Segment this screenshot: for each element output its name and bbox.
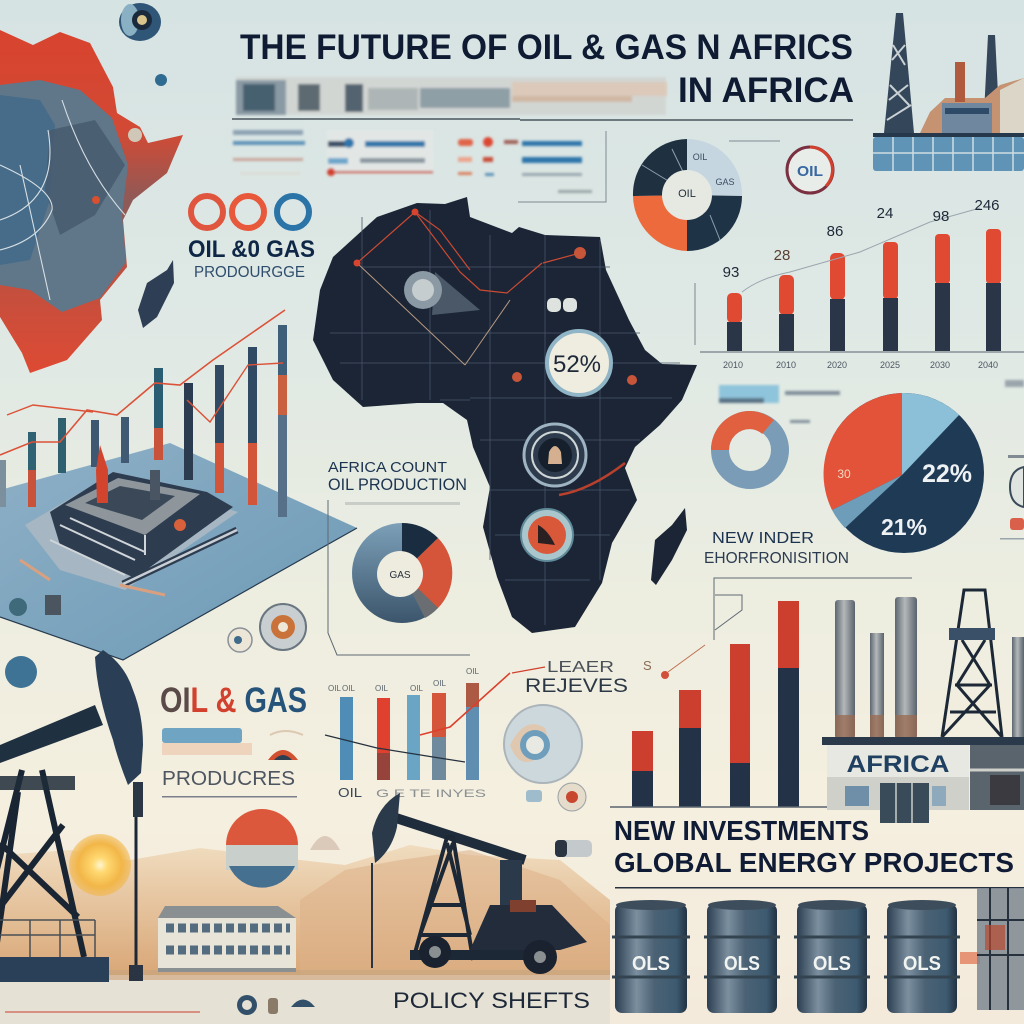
- bars: [0, 325, 287, 517]
- bar chart: top right: 2020: [827, 360, 847, 370]
- icon: left pumpjack and derrick: [0, 650, 143, 982]
- bar chart: top right: 24: [877, 205, 893, 222]
- barrel 1: [612, 900, 690, 1013]
- chart: top donut: GAS: [715, 177, 735, 187]
- panel: central Africa map: [313, 197, 697, 633]
- chart: large pie: 30: [837, 467, 851, 481]
- panel: building: [158, 906, 296, 972]
- label: leader reserves: S: [643, 658, 652, 673]
- bar chart: top right: 2010: [776, 360, 796, 370]
- chart: large pie: [824, 393, 984, 553]
- barrel 3: [794, 900, 870, 1013]
- title: IN AFRICA: [678, 71, 854, 110]
- bar chart: top right: 86: [827, 223, 843, 240]
- panel: Africa refinery: AFRICA: [846, 751, 950, 778]
- chart: right small donut: [720, 420, 780, 480]
- label: policy shifts: POLICY SHEFTS: [393, 988, 590, 1013]
- panel: Oil and gas producers: OIL & GAS: [160, 681, 307, 720]
- bar chart: top right: 2030: [930, 360, 950, 370]
- callout: 52 percent: [547, 331, 611, 395]
- heading: new investments: NEW INVESTMENTS: [614, 815, 869, 846]
- panel: oil and gas production rings: [188, 196, 315, 281]
- panel: offshore rig top right: [873, 13, 1024, 171]
- panel: left chart and oil platform: [0, 310, 357, 660]
- heading: new investments: [614, 815, 1024, 888]
- chart: top donut: OIL: [693, 152, 707, 162]
- icon: map lens: [404, 271, 480, 315]
- panel: oil and gas production rings: PRODOURGGE: [194, 264, 305, 281]
- chart: lower bar chart: OIL: [338, 785, 362, 800]
- label: new index energy: NEW INDER: [712, 530, 814, 547]
- label: new index energy: [704, 530, 849, 567]
- chart: lower bar chart: G E TE INYES: [376, 788, 486, 800]
- chart: lower bar chart: OIL: [375, 684, 388, 693]
- label: Africa country oil production: AFRICA COUNT: [328, 459, 447, 476]
- label: leader reserves: LEAER: [547, 659, 614, 676]
- icon: orange arc: [559, 463, 625, 495]
- panel: Africa refinery: [822, 590, 1024, 823]
- barrel 1: OLS: [632, 953, 670, 975]
- barrel 3: OLS: [813, 953, 851, 975]
- chart: central pie: GAS: [389, 570, 411, 581]
- label: leader reserves: [512, 645, 705, 697]
- icon: reserves gauge: [504, 705, 586, 811]
- label: Africa country oil production: [328, 459, 467, 505]
- icon: ring gauge: [729, 141, 833, 193]
- icon: derrick: [942, 590, 1002, 737]
- icon: lens pair: [5, 604, 306, 688]
- icon: Madagascar shape: [138, 260, 174, 328]
- panel: desert landscape: [0, 834, 610, 1024]
- barrel 4: [884, 900, 960, 1013]
- chart: central pie: [352, 523, 452, 623]
- panel: small legend lists: [233, 130, 592, 193]
- barrel 4: OLS: [903, 953, 941, 975]
- chart: large pie: 21%: [881, 514, 927, 540]
- chart: large pie: 22%: [922, 460, 972, 488]
- icon: map marker red: [521, 509, 573, 561]
- callout: 52 percent: 52%: [553, 351, 601, 378]
- chart: top donut: [633, 139, 742, 251]
- divider line: [232, 119, 853, 120]
- barrel 2: [704, 900, 780, 1013]
- chart: top donut: OIL: [678, 188, 696, 200]
- title: THE FUTURE OF OIL & GAS N AFRICS: [240, 28, 853, 67]
- icon: small dot: [155, 74, 167, 86]
- bar chart: top right: [695, 197, 1024, 370]
- bar chart: investment bars: [610, 601, 830, 807]
- chart: lower bar chart: OIL: [342, 684, 355, 693]
- panel: oil and gas production rings: OIL &0 GAS: [188, 236, 315, 263]
- panel: subtitle strip: [236, 77, 667, 115]
- panel: Oil and gas producers: [160, 681, 307, 798]
- label: leader reserves: REJEVES: [525, 676, 628, 697]
- title: [240, 28, 854, 110]
- chart: lower bar chart: OIL: [410, 684, 423, 693]
- icon: barrels: [612, 900, 960, 1013]
- bar chart: top right: 98: [933, 208, 949, 225]
- icon: top lens: [119, 3, 161, 41]
- icon: right edge structure: [960, 888, 1024, 1010]
- chart: lower bar chart: OIL: [328, 684, 341, 693]
- bar chart: top right: 2025: [880, 360, 900, 370]
- chart: lower bar chart: OIL: [433, 679, 446, 688]
- heading: new investments: GLOBAL ENERGY PROJECTS: [614, 847, 1014, 878]
- icon: sun disc gauge: [226, 809, 298, 888]
- icon: Madagascar: [651, 508, 687, 585]
- frame lines: [518, 131, 606, 202]
- label: Africa country oil production: OIL PRODUCTION: [328, 475, 467, 494]
- icon: refinery platform: [20, 445, 238, 595]
- bar chart: top right: 28: [774, 247, 790, 264]
- chart: lower bar chart: OIL: [466, 667, 479, 676]
- icon: center pumpjack truck: [372, 793, 592, 974]
- icon: ring gauge: OIL: [797, 163, 823, 180]
- connector lines: [328, 500, 912, 655]
- bar chart: top right: 2040: [978, 360, 998, 370]
- barrel 2: OLS: [724, 953, 760, 975]
- panel: top-left abstract Africa map: [0, 30, 183, 373]
- label: new index energy: EHORFRONISITION: [704, 550, 849, 567]
- icon: white pills: [547, 298, 577, 312]
- chart: lower bar chart: [325, 667, 510, 800]
- icon: right edge badge: [1000, 455, 1024, 540]
- label: small strip above pie: [719, 380, 1024, 423]
- bar chart: top right: 246: [974, 197, 1000, 214]
- bar chart: top right: 93: [723, 264, 739, 281]
- panel: Oil and gas producers: PRODUCRES: [162, 768, 295, 790]
- bar chart: top right: 2010: [723, 360, 743, 370]
- icon: map marker: [524, 424, 586, 486]
